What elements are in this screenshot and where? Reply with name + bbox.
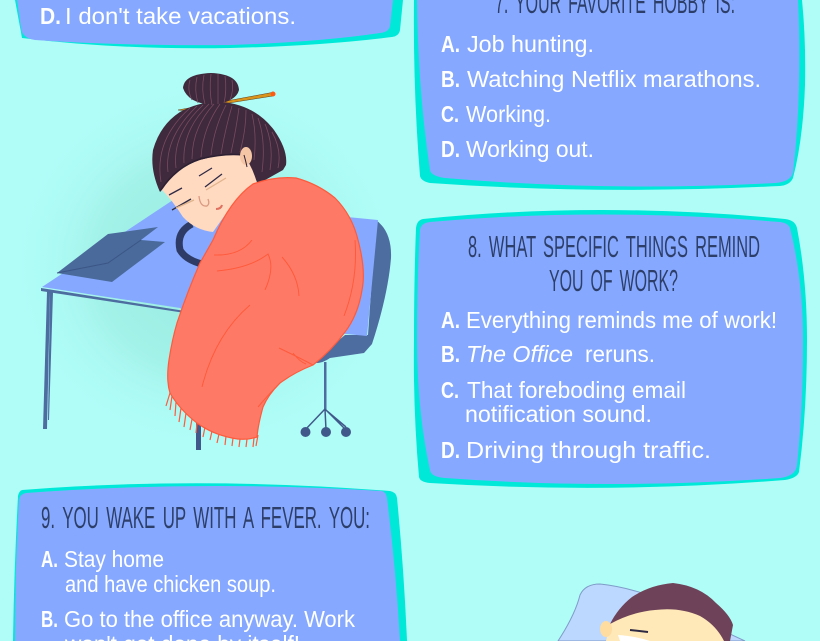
answer options: A. bbox=[41, 546, 58, 572]
chair back and seat bbox=[300, 220, 391, 437]
pencil in hair bbox=[178, 92, 276, 110]
hair bun bbox=[183, 73, 239, 105]
pillow bbox=[558, 584, 745, 641]
answer options: A. bbox=[441, 31, 460, 57]
bangs edge bbox=[160, 154, 243, 191]
blanket bbox=[166, 178, 363, 447]
answer options: C. bbox=[441, 101, 459, 127]
answer options: notification sound. bbox=[465, 401, 652, 427]
answer options: D. bbox=[441, 136, 460, 162]
heading bbox=[468, 229, 760, 298]
answer options: B. bbox=[441, 341, 460, 367]
answer options: B. bbox=[41, 606, 58, 632]
laptop bbox=[57, 227, 165, 282]
answer options: Driving through traffic. bbox=[466, 437, 711, 463]
answer options: D. bbox=[441, 437, 460, 463]
answer options: reruns. bbox=[585, 341, 655, 367]
option D: I don't take vacations. bbox=[65, 3, 296, 29]
answer options: and have chicken soup. bbox=[65, 571, 276, 597]
answer options: The Office bbox=[466, 341, 573, 367]
heading: 9. YOU WAKE UP WITH A FEVER. YOU: bbox=[41, 500, 370, 535]
answer options: B. bbox=[441, 66, 460, 92]
panel: question 7 favorite hobby bbox=[414, 0, 805, 190]
answer options: Working. bbox=[466, 101, 551, 127]
panel: question 6 answer card bbox=[15, 0, 403, 48]
ear bbox=[600, 621, 612, 637]
illustration: sick man lying on a pillow bbox=[558, 583, 745, 641]
hair strands bbox=[160, 74, 279, 182]
option D: D. bbox=[40, 3, 61, 29]
hair bbox=[610, 583, 733, 641]
answer options: Watching Netflix marathons. bbox=[467, 66, 761, 92]
answer options: Stay home bbox=[64, 546, 164, 572]
answer options: A. bbox=[441, 307, 460, 333]
answer options bbox=[441, 31, 761, 162]
answer options bbox=[441, 307, 777, 463]
answer options: Go to the office anyway. Work bbox=[64, 606, 355, 632]
desk bbox=[41, 200, 378, 450]
answer options: Working out. bbox=[466, 136, 594, 162]
panel: question 8 reminders of work bbox=[414, 210, 807, 488]
answer options: Job hunting. bbox=[467, 31, 594, 57]
answer options bbox=[41, 546, 355, 641]
illustration: woman asleep at desk under a blanket bbox=[41, 73, 391, 450]
answer options: Everything reminds me of work! bbox=[466, 307, 777, 333]
hair bbox=[152, 102, 286, 192]
blanket fringe bbox=[166, 393, 258, 447]
heading: YOU OF WORK? bbox=[549, 263, 678, 298]
brow and eye bbox=[618, 630, 650, 641]
face bbox=[162, 155, 257, 232]
closed eyes, brows, nose, mouth bbox=[169, 168, 226, 210]
panel: question 9 wake up with a fever bbox=[13, 483, 407, 641]
headset band bbox=[179, 224, 202, 264]
answer options: C. bbox=[441, 377, 459, 403]
face bbox=[606, 609, 724, 641]
ear bbox=[240, 147, 252, 167]
answer options: That foreboding email bbox=[467, 377, 686, 403]
